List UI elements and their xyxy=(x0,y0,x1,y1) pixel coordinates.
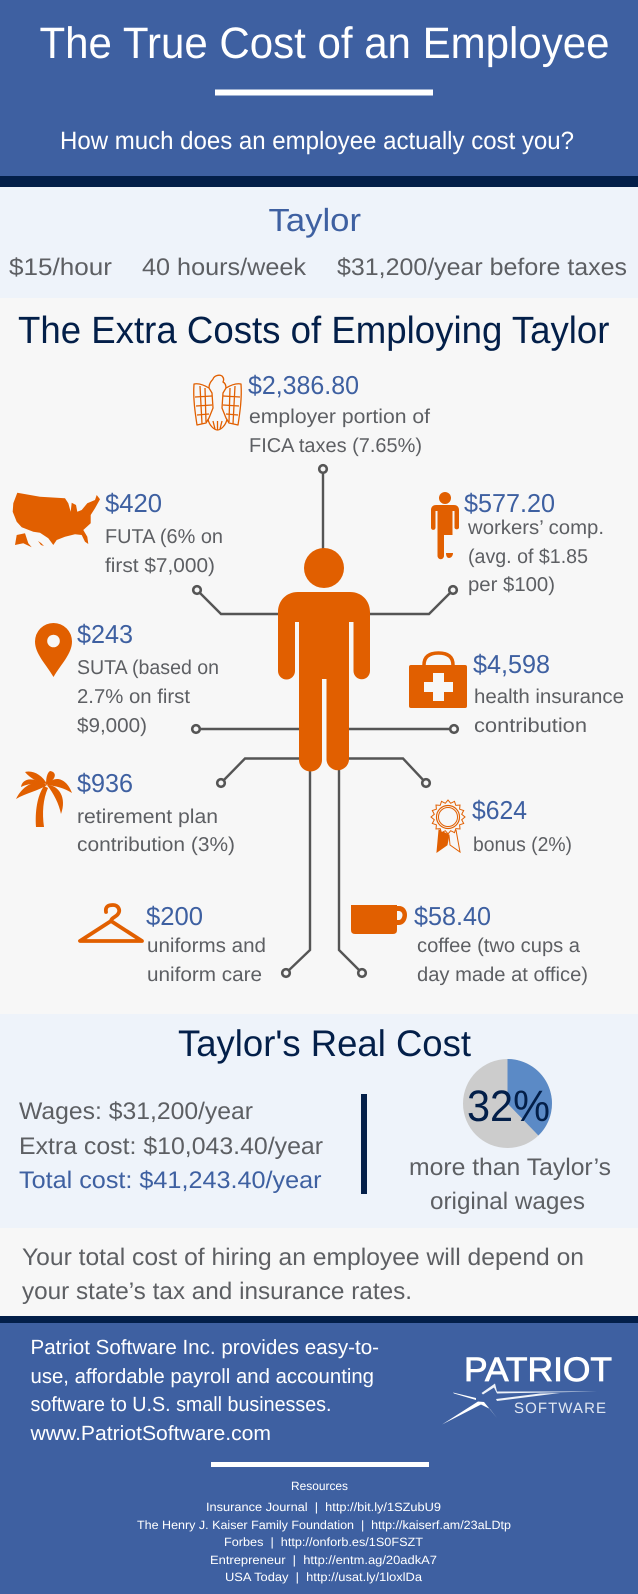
company text xyxy=(29,1336,379,1445)
total cost: Total cost: $41,243.40/year xyxy=(19,1167,322,1194)
resources list: Resources xyxy=(291,1479,348,1493)
title: The True Cost of an Employee xyxy=(40,19,610,68)
item: health insurance: $4,598 xyxy=(473,649,550,679)
item: SUTA: $9,000) xyxy=(77,715,147,737)
note text xyxy=(22,1244,584,1305)
icon: map pin xyxy=(35,623,72,677)
icon: US map xyxy=(13,493,100,547)
item: uniforms: $200 xyxy=(146,901,203,931)
heading: real cost: Taylor's Real Cost xyxy=(178,1023,472,1064)
panel: footer xyxy=(0,1316,638,1594)
item: FUTA: FUTA (6% on xyxy=(105,526,223,548)
item: FICA taxes: FICA taxes (7.65%) xyxy=(249,435,422,457)
company text: Patriot Software Inc. provides easy-to- xyxy=(30,1336,379,1359)
item: retirement plan: contribution (3%) xyxy=(77,834,235,856)
logo: SOFTWARE xyxy=(514,1400,606,1417)
item: SUTA: $243 xyxy=(77,619,133,649)
item: FICA taxes: $2,386.80 xyxy=(248,370,359,400)
note text: your state’s tax and insurance rates. xyxy=(22,1278,412,1305)
item: coffee xyxy=(414,901,588,986)
item: SUTA: 2.7% on first xyxy=(77,686,190,708)
resources list: USA Today | http://usat.ly/1loxlDa xyxy=(225,1570,422,1584)
icon: coffee mug xyxy=(351,905,407,934)
hourly wage: $15/hour xyxy=(9,254,112,281)
panel: real cost xyxy=(0,1014,638,1228)
icon: medical kit xyxy=(409,653,467,708)
resources list: Entrepreneur | http://entm.ag/20adkA7 xyxy=(210,1553,437,1567)
icon: central person xyxy=(278,548,370,772)
item: workers' comp: $577.20 xyxy=(464,488,555,518)
company text: www.PatriotSoftware.com xyxy=(29,1422,271,1445)
resources list: Insurance Journal | http://bit.ly/1SZubU9 xyxy=(206,1500,441,1514)
item: health insurance xyxy=(473,649,624,737)
note text: Your total cost of hiring an employee will depend on xyxy=(22,1244,584,1271)
panel: Taylor profile xyxy=(0,187,638,298)
item: workers' comp: (avg. of $1.85 xyxy=(468,546,588,568)
item: uniforms: uniform care xyxy=(147,964,262,986)
connector lines xyxy=(192,465,458,977)
wages: Wages: $31,200/year xyxy=(19,1098,253,1125)
item: FUTA: $420 xyxy=(105,488,162,518)
item: coffee: day made at office) xyxy=(417,964,588,986)
company text: software to U.S. small businesses. xyxy=(30,1393,332,1416)
item: uniforms xyxy=(146,901,266,986)
item: health insurance: contribution xyxy=(474,715,587,737)
logo xyxy=(442,1351,612,1424)
icon: award ribbon xyxy=(431,800,465,852)
item: FICA taxes xyxy=(248,370,430,457)
item: retirement plan xyxy=(77,768,235,856)
annual wage: $31,200/year before taxes xyxy=(337,254,627,281)
icon: palm tree xyxy=(16,771,72,827)
icon: injured worker xyxy=(431,492,459,559)
item: retirement plan: retirement plan xyxy=(77,806,218,828)
item: coffee: $58.40 xyxy=(414,901,491,931)
icon: eagle xyxy=(194,375,241,430)
item: coffee: coffee (two cups a xyxy=(417,935,581,957)
divider xyxy=(361,1094,367,1194)
item: FUTA xyxy=(105,488,223,577)
item: SUTA xyxy=(77,619,219,737)
resources list xyxy=(137,1479,511,1584)
item: bonus: bonus (2%) xyxy=(473,834,572,856)
item: retirement plan: $936 xyxy=(77,768,133,798)
item: FICA taxes: employer portion of xyxy=(249,406,430,428)
resources list: The Henry J. Kaiser Family Foundation | http://kaiserf.am/23aLDtp xyxy=(137,1518,511,1532)
company text: use, affordable payroll and accounting xyxy=(30,1365,374,1388)
extra cost: Extra cost: $10,043.40/year xyxy=(19,1133,323,1160)
item: workers' comp: workers’ comp. xyxy=(467,517,604,539)
icon: coat hanger xyxy=(80,905,142,941)
resources list: Forbes | http://onforb.es/1S0FSZT xyxy=(224,1535,424,1549)
item: workers' comp xyxy=(464,488,604,596)
weekly hours: 40 hours/week xyxy=(142,254,307,281)
pie chart xyxy=(463,1059,552,1148)
panel: real cost: original wages xyxy=(430,1188,585,1215)
caption: more than Taylor’s xyxy=(409,1154,611,1181)
item: FUTA: first $7,000) xyxy=(105,555,215,577)
item: health insurance: health insurance xyxy=(474,686,624,708)
heading: extra costs: The Extra Costs of Employing Taylor xyxy=(18,310,610,352)
pie chart: 32% xyxy=(467,1082,550,1131)
item: uniforms: uniforms and xyxy=(147,935,266,957)
subtitle: How much does an employee actually cost you? xyxy=(60,127,574,155)
item: workers' comp: per $100) xyxy=(468,574,555,596)
panel: header xyxy=(0,0,638,187)
logo: PATRIOT xyxy=(464,1351,612,1389)
item: bonus: $624 xyxy=(472,795,527,825)
item: SUTA: SUTA (based on xyxy=(77,657,219,679)
item: bonus xyxy=(472,795,572,856)
heading: Taylor: Taylor xyxy=(268,202,361,238)
